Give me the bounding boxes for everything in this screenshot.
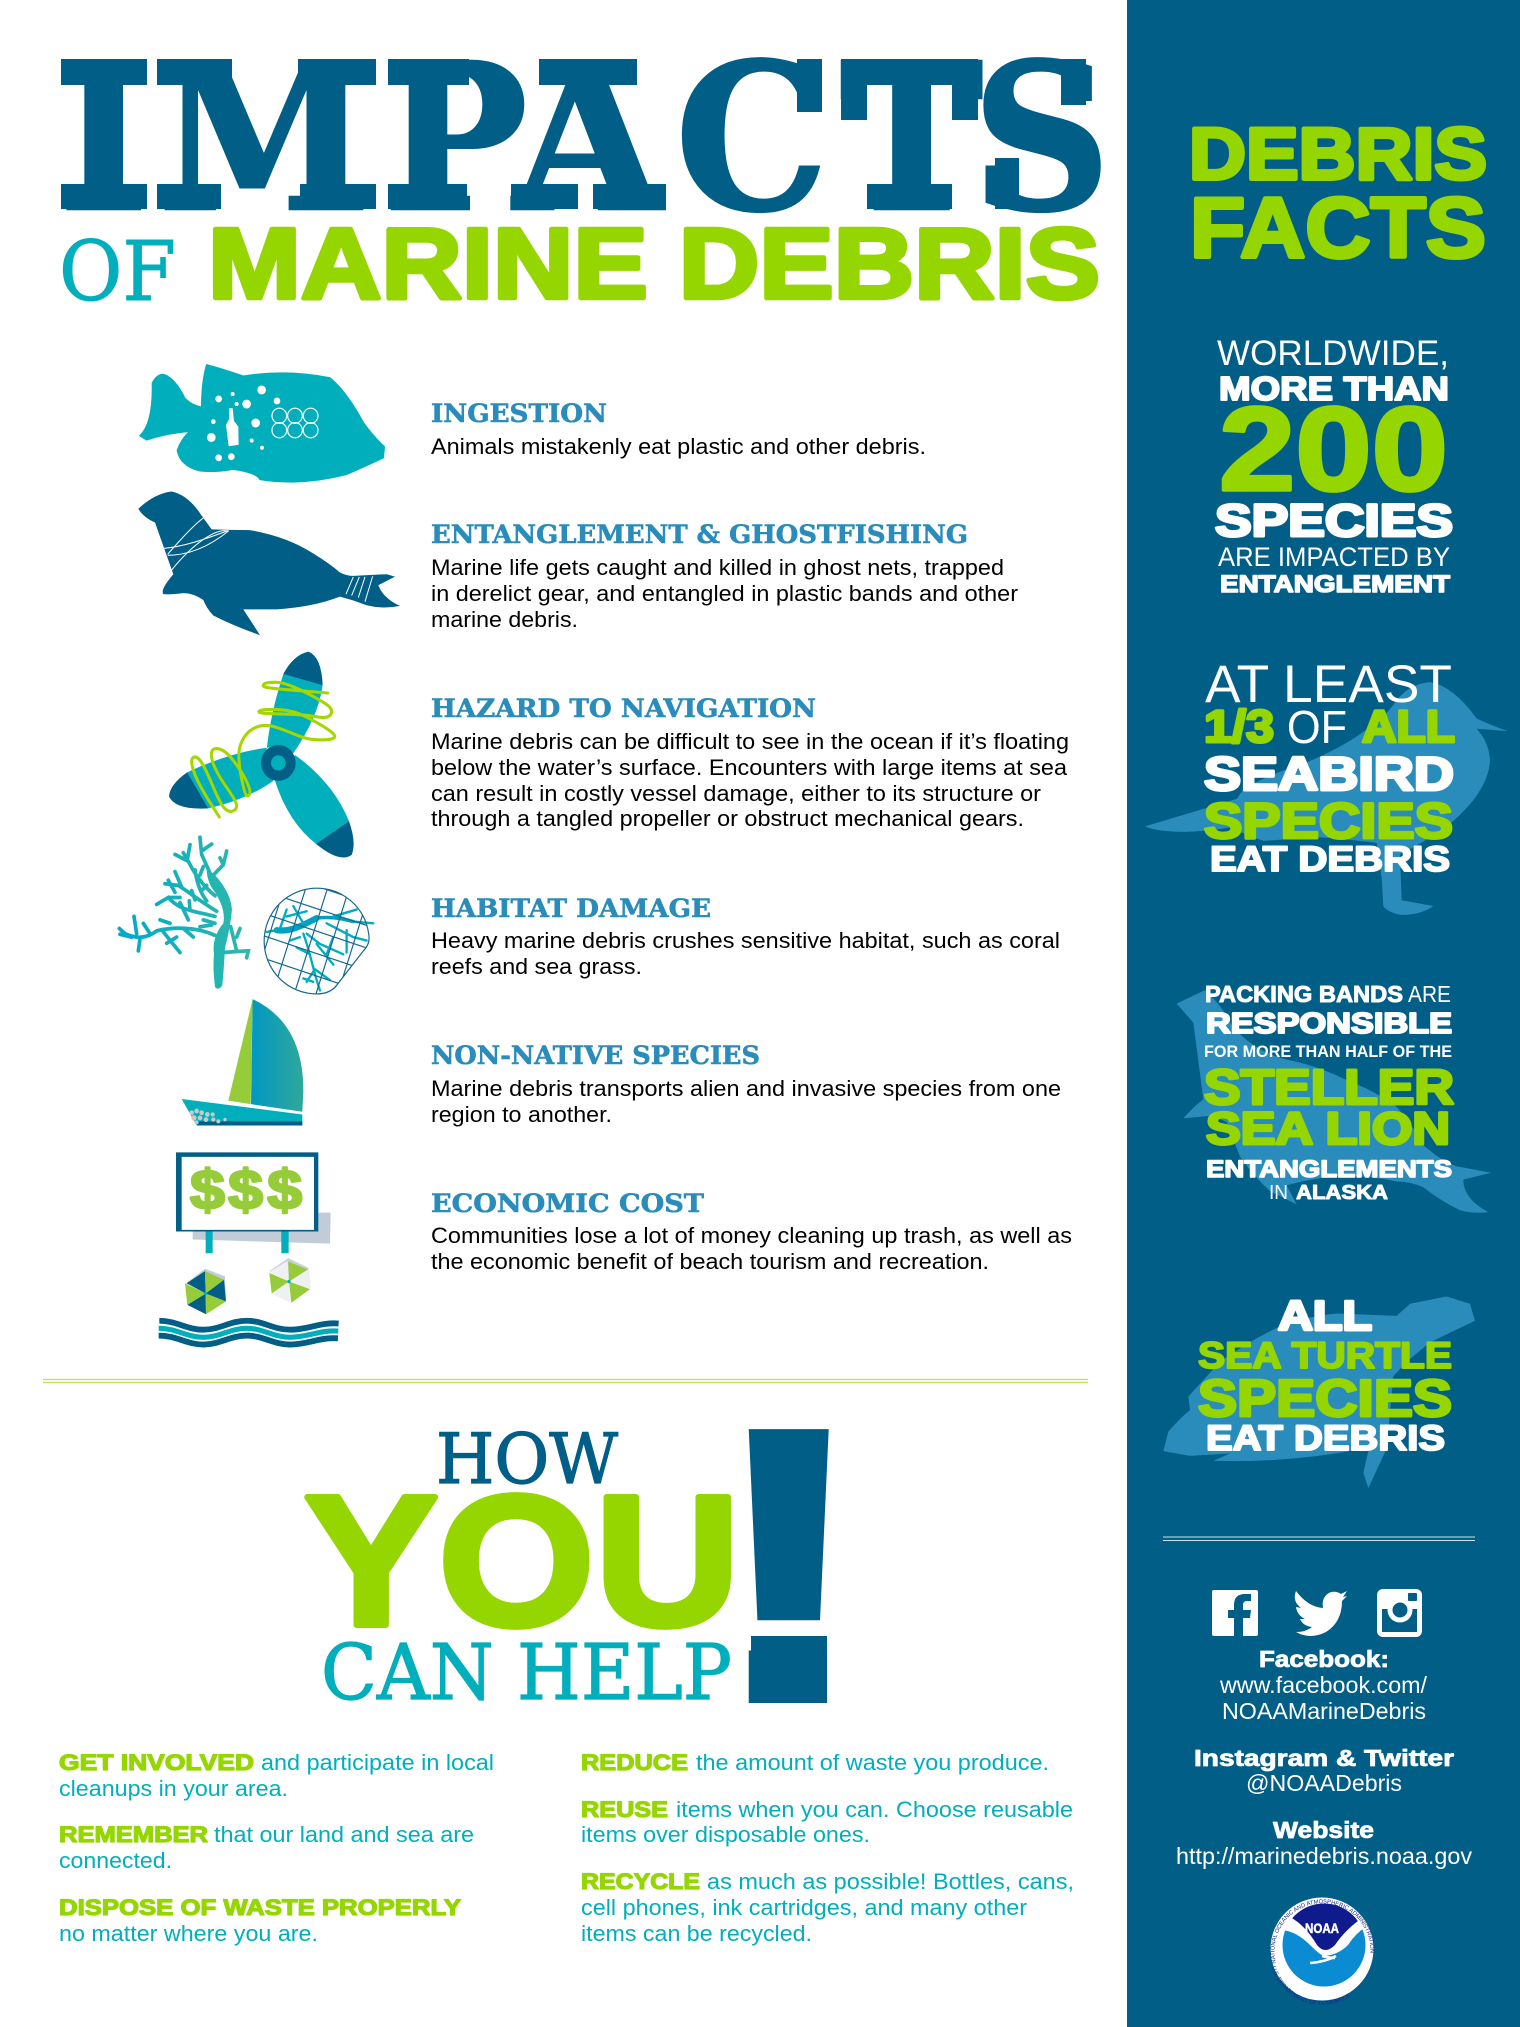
icon detail: right umbrella xyxy=(269,1258,311,1303)
action: get involved: GET INVOLVED xyxy=(59,1750,254,1775)
text: non-native body: region to another. xyxy=(431,1102,612,1127)
icon detail: hub xyxy=(261,745,296,781)
action: remember: REMEMBER xyxy=(59,1822,208,1847)
fact: seabirds: EAT DEBRIS xyxy=(1210,840,1450,879)
fact: steller sea lion xyxy=(1177,981,1491,1213)
fact: seabirds: SEABIRD xyxy=(1204,747,1454,800)
heading words: CAN HELP: CAN HELP xyxy=(321,1629,732,1718)
contact details: @NOAADebris xyxy=(1246,1770,1402,1796)
heading: debris facts: FACTS xyxy=(1190,181,1486,276)
icon detail: blade tips xyxy=(169,652,354,858)
contact details: Instagram & Twitter xyxy=(1194,1745,1454,1771)
icon detail: barnacles xyxy=(189,1109,227,1124)
contact details xyxy=(1176,1646,1473,1869)
icon: fouled propeller xyxy=(169,652,354,858)
text: economic body xyxy=(431,1223,1072,1274)
icon: waves xyxy=(159,1321,339,1345)
contact details: Website xyxy=(1273,1817,1374,1843)
heading: how you can help xyxy=(304,1343,882,1788)
fact: steller sea lion: ALASKA xyxy=(1296,1182,1388,1204)
icon detail: billboard shadow xyxy=(193,1213,331,1244)
heading: non-native species: NON-NATIVE SPECIES xyxy=(431,1041,760,1070)
fact: steller sea lion: PACKING BANDS xyxy=(1205,981,1403,1007)
icon: beach umbrellas xyxy=(185,1258,311,1314)
icon detail: blue sail xyxy=(251,999,303,1112)
action: remember xyxy=(59,1822,474,1873)
heading: economic cost: ECONOMIC COST xyxy=(431,1189,704,1218)
text: economic body: the economic benefit of beach tourism and recreation. xyxy=(431,1249,989,1274)
logo: NOAA xyxy=(1270,1898,1374,2005)
icon detail: entangling bands xyxy=(164,518,373,602)
action: remember: that our land and sea are xyxy=(214,1822,474,1847)
heading: ingestion: INGESTION xyxy=(431,399,607,428)
icon: healthy coral xyxy=(119,837,248,989)
icon detail: green line wrapped around blades xyxy=(192,682,335,817)
contact details: http://marinedebris.noaa.gov xyxy=(1176,1843,1473,1869)
fact: seabirds xyxy=(1145,655,1508,915)
heading: debris facts xyxy=(1189,114,1487,276)
fact: sea turtles: SPECIES xyxy=(1198,1370,1452,1428)
text: hazard body: can result in costly vessel damage, either to its structure or xyxy=(431,781,1042,806)
logo text: ring upper: NATIONAL OCEANIC AND ATMOSPHERIC ADMINISTRATION xyxy=(1270,1899,1374,1964)
fact: steller sea lion: FOR MORE THAN HALF OF THE xyxy=(1204,1042,1452,1061)
block: ingestion xyxy=(431,399,926,459)
text: hazard body: Marine debris can be difficult to see in the ocean if it’s floating xyxy=(431,729,1069,754)
fact: steller sea lion: SEA LION xyxy=(1206,1103,1450,1154)
icon: billboard showing money xyxy=(176,1152,331,1253)
heading: habitat damage: HABITAT DAMAGE xyxy=(431,894,711,923)
icon detail: billboard posts xyxy=(206,1232,289,1253)
icon: facebook xyxy=(1212,1590,1258,1636)
title word: OF: OF xyxy=(59,225,176,320)
text: entanglement body xyxy=(431,555,1019,632)
icon: twitter xyxy=(1295,1591,1347,1636)
fact: steller sea lion: STELLER xyxy=(1204,1061,1454,1115)
icon detail: left umbrella xyxy=(185,1269,226,1314)
block: entanglement and ghostfishing xyxy=(431,520,1019,632)
icon detail: billboard frame xyxy=(182,1157,314,1230)
text: hazard body: through a tangled propeller or obstruct mechanical gears. xyxy=(431,806,1024,831)
fact: 200 species entanglement: WORLDWIDE, xyxy=(1217,334,1449,373)
text: non-native body: Marine debris transports alien and invasive species from one xyxy=(431,1076,1061,1101)
logo text: NOAA: NOAA xyxy=(1305,1920,1339,1936)
fact: steller sea lion: ENTANGLEMENTS xyxy=(1206,1156,1452,1183)
heading mark: exclamation: ! xyxy=(696,1343,882,1788)
icon detail: net grid xyxy=(264,889,366,994)
title line: IMPACTS: IMPACTS xyxy=(59,18,1111,257)
action: reuse xyxy=(581,1797,1073,1847)
text: habitat body: Heavy marine debris crushes sensitive habitat, such as coral xyxy=(431,928,1060,953)
action: reuse: REUSE xyxy=(581,1797,668,1822)
fact: steller sea lion: RESPONSIBLE xyxy=(1206,1008,1452,1040)
action: dispose of waste: DISPOSE OF WASTE PROPERLY xyxy=(59,1895,461,1920)
icon detail: hull xyxy=(182,1099,302,1125)
fact: sea turtles xyxy=(1163,1292,1475,1488)
fact: sea turtles: EAT DEBRIS xyxy=(1206,1419,1445,1458)
icon detail: net outline xyxy=(264,888,369,994)
block: economic cost xyxy=(431,1189,1072,1274)
column: actions left xyxy=(59,1750,494,1946)
heading: hazard: HAZARD TO NAVIGATION xyxy=(431,694,816,723)
stat number: 200: 200 xyxy=(1219,383,1448,516)
heading word: HOW: HOW xyxy=(436,1420,618,1500)
fact: 200 species entanglement: ENTANGLEMENT xyxy=(1220,571,1450,598)
icon: fish with ingested debris xyxy=(140,365,384,482)
fact: steller sea lion: IN xyxy=(1269,1182,1288,1204)
text: habitat body xyxy=(431,928,1060,979)
icon: entangled seal xyxy=(138,492,400,635)
text: non-native body xyxy=(431,1076,1061,1127)
action: recycle: cell phones, ink cartridges, and many other xyxy=(581,1895,1028,1920)
icon: instagram xyxy=(1377,1589,1422,1637)
block: habitat damage xyxy=(431,894,1060,979)
contact details: NOAAMarineDebris xyxy=(1222,1698,1426,1724)
silhouette: sea lion xyxy=(1177,990,1491,1213)
icon detail: propeller blades xyxy=(187,674,349,844)
action: dispose of waste: no matter where you are. xyxy=(59,1921,318,1946)
heading: debris facts: DEBRIS xyxy=(1189,114,1487,195)
contact details: www.facebook.com/ xyxy=(1219,1672,1428,1698)
fact: 200 species entanglement: ARE IMPACTED BY xyxy=(1218,542,1450,572)
title line: MARINE DEBRIS: MARINE DEBRIS xyxy=(208,208,1100,320)
silhouette: seabird xyxy=(1145,682,1508,915)
heading word: YOU: YOU xyxy=(304,1458,740,1665)
icon detail: trapped coral xyxy=(267,906,373,990)
icon detail: dollar signs: $$$ xyxy=(190,1158,302,1221)
silhouette: sea turtle xyxy=(1163,1297,1475,1488)
title xyxy=(59,18,1111,320)
action: recycle xyxy=(581,1869,1074,1946)
text: entanglement body: in derelict gear, and entangled in plastic bands and other xyxy=(431,581,1019,606)
logo text: ring lower: U.S. DEPARTMENT OF COMMERCE xyxy=(1272,1966,1351,2005)
fact: 200 species entanglement: MORE THAN xyxy=(1219,370,1449,407)
fact: sea turtles: ALL xyxy=(1278,1292,1372,1339)
action: reduce: the amount of waste you produce. xyxy=(696,1750,1049,1775)
action: dispose of waste xyxy=(59,1895,461,1946)
fact: sea turtles: SEA TURTLE xyxy=(1198,1335,1452,1376)
text: habitat body: reefs and sea grass. xyxy=(431,954,642,979)
action: get involved: cleanups in your area. xyxy=(59,1776,288,1801)
contact details: Facebook: xyxy=(1259,1646,1389,1672)
text: economic body: Communities lose a lot of money cleaning up trash, as well as xyxy=(431,1223,1072,1248)
action: reduce: REDUCE xyxy=(581,1750,688,1775)
text: ingestion body: Animals mistakenly eat plastic and other debris. xyxy=(431,434,926,459)
action: recycle: items can be recycled. xyxy=(581,1921,812,1946)
icon: sailboat carrying invasive species xyxy=(182,999,303,1125)
action: get involved: and participate in local xyxy=(261,1750,494,1775)
text: entanglement body: marine debris. xyxy=(431,607,578,632)
action: reuse: items when you can. Choose reusable xyxy=(676,1797,1073,1822)
action: recycle: RECYCLE xyxy=(581,1869,700,1894)
fact: steller sea lion: ARE xyxy=(1408,981,1451,1007)
text: entanglement body: Marine life gets caught and killed in ghost nets, trapped xyxy=(431,555,1004,580)
text: hazard body: below the water’s surface. Encounters with large items at sea xyxy=(431,755,1067,780)
text: hazard body xyxy=(431,729,1069,831)
fact: seabirds: 1/3 xyxy=(1204,701,1274,752)
panel: debris facts sidebar background xyxy=(1127,0,1520,2027)
action: reuse: items over disposable ones. xyxy=(581,1822,870,1847)
icon detail: six-pack rings xyxy=(272,408,318,438)
icon detail: debris dots xyxy=(207,385,280,461)
icon detail: green sail xyxy=(228,999,253,1104)
fact: seabirds: ALL xyxy=(1362,701,1455,752)
column: actions right xyxy=(581,1750,1074,1946)
heading: entanglement: ENTANGLEMENT & GHOSTFISHING xyxy=(431,520,968,549)
fact: seabirds: SPECIES xyxy=(1204,793,1453,849)
action: get involved xyxy=(59,1750,494,1801)
fact: 200 species entanglement xyxy=(1215,334,1453,598)
block: hazard to navigation xyxy=(431,694,1069,831)
action: remember: connected. xyxy=(59,1848,172,1873)
fact: seabirds: AT LEAST xyxy=(1205,655,1452,714)
icon: coral crushed under net xyxy=(264,888,374,994)
block: non-native species xyxy=(431,1041,1061,1127)
action: recycle: as much as possible! Bottles, cans, xyxy=(707,1869,1074,1894)
fact: 200 species entanglement: SPECIES xyxy=(1215,495,1453,546)
icon detail: bottle xyxy=(226,408,239,446)
fact: seabirds: OF xyxy=(1287,701,1347,753)
